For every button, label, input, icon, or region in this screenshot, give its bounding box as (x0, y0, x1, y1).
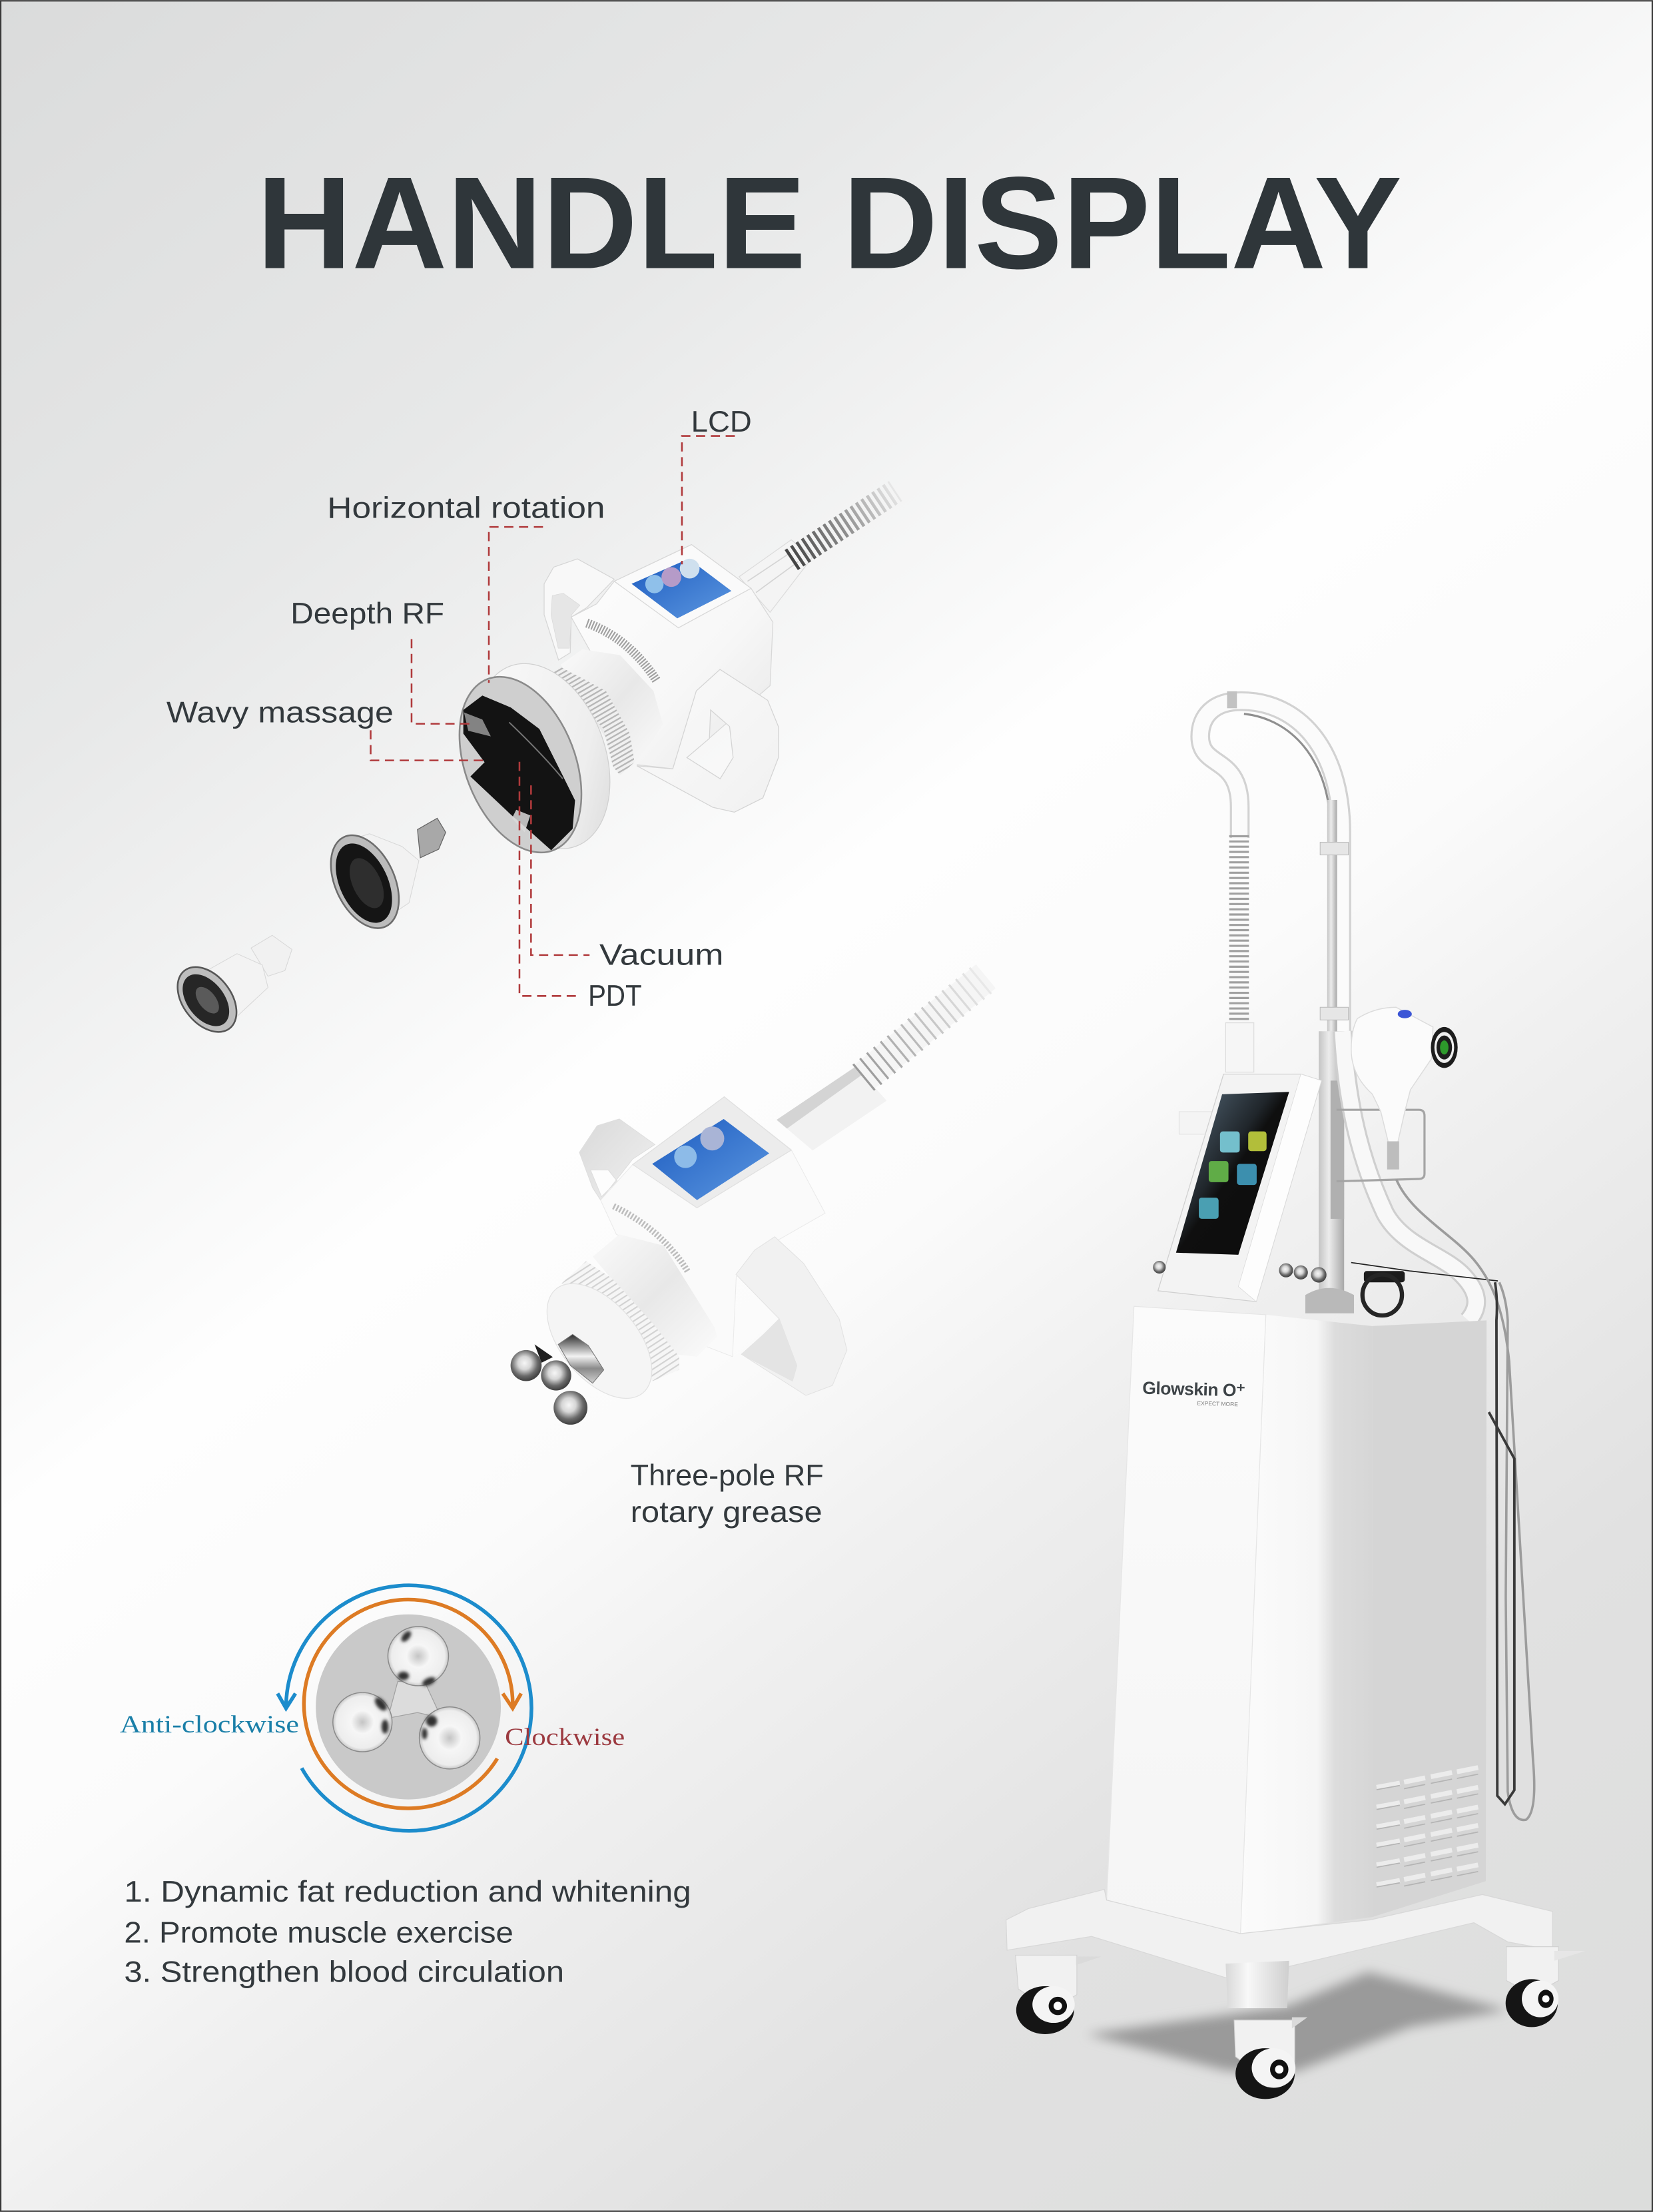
base (1006, 1890, 1552, 1978)
label: Vacuum: Vacuum (599, 939, 723, 972)
handle 2: metal stem (558, 1334, 604, 1383)
label: Three-pole RF rotary grease: Three-pole RF (631, 1459, 824, 1492)
attachment: small head (166, 935, 292, 1043)
label: Deepth RF: Deepth RF (290, 597, 444, 630)
blue anti-clockwise arrow (278, 1585, 531, 1831)
benefits list: 1. Dynamic fat reduction and whitening (124, 1876, 691, 1908)
benefits list (124, 1876, 691, 1989)
gray handpiece cable (1397, 1180, 1534, 1820)
rotation diagram (120, 1585, 625, 1831)
roller hub (388, 1682, 442, 1718)
benefits list: 3. Strengthen blood circulation (124, 1956, 564, 1989)
handle: left grip (544, 559, 614, 660)
attachment: medium head (317, 818, 446, 939)
machine (1006, 691, 1585, 2099)
handle: LCD screen (614, 545, 751, 628)
label: Horizontal rotation: Horizontal rotation (327, 492, 605, 524)
stand-by handle behind tablet (1179, 1112, 1221, 1134)
gray disc (316, 1615, 501, 1800)
right caster (1506, 1947, 1585, 2027)
rear arch tube (1200, 691, 1341, 1034)
benefits list: 2. Promote muscle exercise (124, 1916, 513, 1949)
black cable (1488, 1282, 1514, 1804)
label: Wavy massage: Wavy massage (166, 696, 394, 729)
handle 2: neck and hose coil (777, 976, 986, 1150)
handle 2: three steel balls (511, 1344, 587, 1425)
handle 2: left grip (579, 1119, 655, 1200)
label: Three-pole RF rotary grease (631, 1459, 824, 1529)
rack of balls (1279, 1264, 1327, 1283)
roller balls (333, 1627, 480, 1769)
handle: neck and hose coil (739, 491, 896, 612)
vertical hose coil (1225, 835, 1254, 1072)
handle: right grip (637, 669, 779, 812)
main silver pole (1305, 1031, 1354, 1313)
label: Three-pole RF rotary grease: rotary grease (631, 1496, 823, 1529)
logo: EXPECT MORE (1197, 1400, 1238, 1407)
exploded handle with attachments (166, 491, 896, 1043)
handle 2: knurled collar (561, 1261, 679, 1381)
label: LCD: LCD (691, 406, 752, 438)
handle 2: grip hollow (741, 1319, 797, 1381)
three-pole RF handle (511, 976, 986, 1425)
label: PDT: PDT (588, 980, 642, 1012)
label: Clockwise: Clockwise (505, 1724, 625, 1751)
base pillar (1225, 1961, 1289, 2008)
handle 2: LCD screen (633, 1097, 791, 1208)
cabinet vents (1377, 1768, 1478, 1887)
handle 2: body (601, 1097, 825, 1357)
label: Anti-clockwise: Anti-clockwise (120, 1711, 299, 1738)
handpiece holder bracket (1337, 1110, 1425, 1182)
handle: silver rim (436, 659, 605, 870)
handle: head disc (452, 645, 634, 867)
handle: left grip hollow (551, 593, 579, 648)
center caster (1234, 2018, 1307, 2099)
left caster (1016, 1955, 1102, 2034)
handle: knurled collar (545, 667, 635, 775)
handle: speaker grille (587, 623, 657, 681)
cabinet front (1107, 1306, 1266, 1934)
handle: body (571, 545, 773, 769)
handle 2: right grip (736, 1237, 847, 1395)
title: HANDLE DISPLAY (256, 150, 1402, 296)
black strap and wire (1351, 1263, 1498, 1315)
callout leader lines (371, 436, 735, 996)
thin pole and clamps (1320, 800, 1349, 1032)
tablet side ball (1153, 1261, 1165, 1274)
cabinet bevel (1241, 1315, 1372, 1934)
handle 2: front disc (527, 1265, 672, 1417)
handle: black treatment face (464, 695, 575, 851)
cabinet right side (1372, 1320, 1487, 1917)
floor shadow (1086, 1972, 1508, 2071)
handle: barrel (561, 649, 663, 769)
handle 2: speaker grille (613, 1206, 688, 1272)
logo: Glowskin O⁺ (1142, 1378, 1245, 1401)
handle 2: barrel (593, 1234, 717, 1357)
front white tube (1343, 1031, 1476, 1320)
tablet (1158, 1074, 1321, 1301)
orange clockwise arrow (304, 1600, 521, 1808)
handpiece (1351, 1007, 1458, 1170)
